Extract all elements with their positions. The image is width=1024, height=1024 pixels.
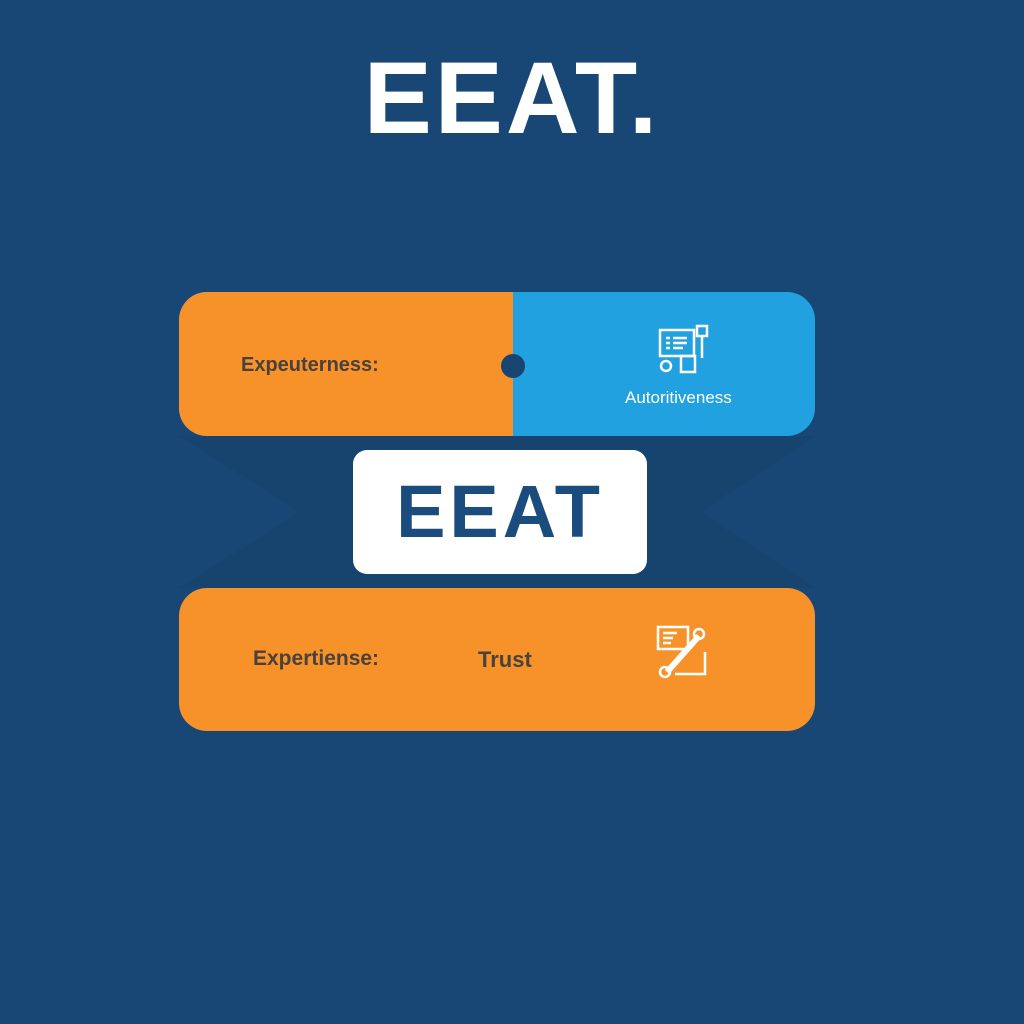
icon: trust	[656, 626, 706, 678]
text: Expeuterness: Expeuterness:	[241, 354, 379, 376]
text: Expertiense: Expertiense:	[253, 647, 379, 670]
icon: authoritativeness	[658, 324, 708, 374]
center EEAT box	[353, 450, 647, 574]
panel: experience orange half	[179, 292, 513, 436]
center EEAT box: EEAT	[396, 470, 604, 553]
text: Autoritiveness: Autoritiveness	[625, 388, 732, 407]
text: Trust: Trust	[478, 647, 532, 672]
panel: bottom bar	[179, 588, 815, 731]
dot connector	[501, 354, 525, 378]
title: EEAT.	[364, 41, 660, 155]
panel: top bar	[179, 292, 815, 436]
